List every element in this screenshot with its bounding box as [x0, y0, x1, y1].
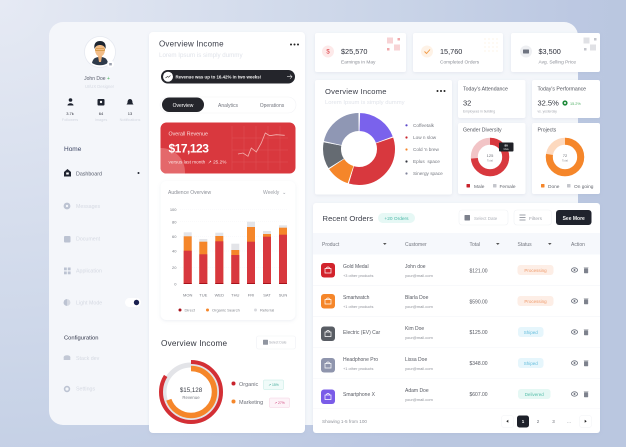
card: overall revenue: versus last month ↗ 25.2%: [168, 160, 226, 164]
nav: settings: Settings: [76, 386, 95, 392]
card: projects: [532, 123, 600, 194]
panel: overview income pie: Overview Income: [325, 87, 387, 96]
table header: [313, 233, 600, 254]
chart: stacked bars: SUN: [279, 292, 287, 298]
heading: overview income: Overview Income: [159, 40, 224, 48]
card: today's performance: Today's Performance: [538, 86, 586, 92]
card: gender diversity: Total: [487, 158, 493, 162]
button: filters: Filters: [529, 216, 543, 222]
chart: stacked bars: 20: [172, 265, 177, 270]
text: ring center value: $15,128: [180, 387, 203, 394]
table row: smartphone x: $607.00: [470, 392, 488, 398]
tabs: Analytics: [218, 103, 238, 109]
chart: stacked bars: SAT: [263, 292, 271, 298]
chart: stacked bars: 40: [172, 248, 177, 254]
stat: followers: 3.7k: [66, 111, 74, 116]
badge: order count: +20 Orders: [384, 216, 409, 222]
card: today's attendance: [458, 80, 526, 118]
chart legend: Organic Search: [212, 308, 240, 312]
pagination: 2: [537, 419, 540, 424]
button: select date: Select Date: [269, 340, 287, 344]
stat: followers: [62, 98, 78, 122]
card: overall revenue: Overall Revenue: [168, 132, 208, 138]
chart: stacked bars: THU: [231, 292, 240, 298]
stat: followers: Followers: [62, 118, 78, 122]
table row: gold medal: Processing: [524, 268, 547, 273]
card: gender diversity: Gender Diversity: [463, 128, 502, 134]
button: see more: [556, 210, 592, 225]
stat card: completed orders: [413, 33, 503, 72]
tabs: [160, 97, 296, 113]
icon: avatar: [84, 36, 116, 68]
legend: pie: Low n slow: [413, 135, 437, 140]
table row: smartwatch: Blarla Doe: [405, 295, 429, 301]
stat: images: [95, 99, 107, 122]
chart: stacked bars: 0: [174, 282, 177, 286]
nav: document: Document: [76, 236, 101, 242]
table header: Action: [571, 242, 585, 248]
panel: overview income pie: [315, 80, 452, 194]
table row: headphone pro: [321, 357, 588, 372]
table row: smartwatch: your@mail.com: [405, 304, 434, 309]
table row: electric car: your@mail.com: [405, 335, 434, 340]
nav: application: Application: [76, 268, 102, 274]
card: projects: Total: [562, 158, 568, 162]
table row: smartphone x: Delivered: [525, 392, 544, 397]
chart: stacked bars: WED: [215, 292, 224, 298]
stat: images: Images: [95, 118, 107, 122]
chart: gender donut: [474, 141, 506, 173]
card: gender diversity: Male: [474, 184, 485, 190]
stat card: completed orders: Completed Orders: [440, 60, 480, 66]
legend: pie: Coffeetalk: [413, 123, 435, 128]
text: subtitle: Lorem Ipsum is simply dummy: [159, 52, 243, 59]
table row: smartphone x: Adam Doe: [405, 388, 429, 394]
chart: stacked bars: FRI: [248, 292, 254, 298]
stat: notifications: [120, 99, 140, 122]
banner: revenue alert: [161, 70, 295, 84]
table row: gold medal: your@mail.com: [405, 273, 434, 278]
table row: gold medal: $121.00: [470, 268, 488, 274]
table row: headphone pro: +1 other products: [343, 366, 373, 371]
card: today's performance: 15.2%: [570, 102, 581, 106]
card: projects: Done: [548, 184, 560, 190]
nav: document: [64, 236, 101, 242]
table row: smartphone x: your@mail.com: [405, 397, 434, 402]
stat: notifications: 13: [128, 111, 133, 116]
card: today's performance: [532, 80, 600, 118]
text: user role: UI/UX Designer: [85, 84, 115, 89]
stat card: selling price: $3,500: [538, 47, 561, 56]
tooltip: 80: [505, 144, 508, 148]
stat: images: 64: [99, 111, 104, 116]
card: gender diversity: 125: [487, 153, 494, 158]
nav: messages: Messages: [76, 204, 100, 210]
card: audience overview: Audience Overview: [168, 190, 211, 196]
panel: main background: [49, 22, 578, 425]
card: today's attendance: 32: [463, 98, 471, 108]
stat card: selling price: [511, 33, 600, 72]
table header: Status: [518, 242, 532, 248]
heading: Home: Home: [64, 146, 82, 153]
table row: smartwatch: +1 other products: [343, 304, 373, 309]
table row: smartwatch: Processing: [524, 299, 547, 304]
table row: gold medal: Gold Medal: [343, 264, 369, 270]
stat card: earnings: $: [326, 50, 330, 56]
table row: electric car: Kim Doe: [405, 326, 424, 332]
chart: projects donut: [549, 141, 581, 173]
table row: electric car: [321, 326, 588, 341]
table row: headphone pro: Shiped: [524, 361, 538, 366]
card: audience overview: [160, 181, 296, 320]
chart: revenue sparkline: [238, 133, 285, 156]
stat card: earnings: Earnings in May: [341, 60, 376, 66]
card: gender diversity: Female: [500, 184, 516, 190]
nav: dashboard: [64, 169, 140, 178]
nav: light mode toggle: Light Mode: [76, 300, 102, 306]
chart: stacked bars: 80: [172, 220, 177, 224]
nav: light mode toggle: [64, 298, 141, 307]
chart legend: [178, 308, 274, 312]
legend: organic: Organic: [239, 382, 259, 388]
table row: electric car: $125.00: [470, 330, 488, 336]
nav: messages: [64, 203, 100, 210]
pagination: [502, 416, 592, 428]
text: ring center label: Revenue: [182, 395, 200, 400]
table row: electric car: Shiped: [524, 330, 538, 335]
legend: organic: ↗ 15%: [268, 383, 279, 387]
table row: gold medal: John doe: [405, 264, 426, 270]
stat card: selling price: Avg. Selling Price: [538, 60, 576, 66]
nav: application: [64, 268, 102, 274]
legend: pie: Eplus space: [413, 159, 440, 164]
nav: settings: [65, 386, 95, 392]
legend: pie: [405, 123, 443, 176]
nav: dashboard: Dashboard: [76, 172, 102, 178]
tabs: Overview: [173, 103, 194, 109]
legend: marketing: ↗ 27%: [274, 401, 285, 405]
chart: stacked bars: TUE: [199, 292, 208, 298]
stat card: earnings: $25,570: [341, 47, 367, 56]
panel: middle column: [137, 32, 305, 433]
chart: revenue ring: [161, 362, 221, 422]
button: select date: Select Date: [474, 216, 498, 221]
text: pagination summary: Showing 1-5 from 100: [322, 419, 367, 424]
pagination: ...: [567, 419, 571, 424]
stat card: earnings: [315, 33, 406, 72]
chart: stacked bars: MON: [183, 292, 192, 298]
table row: smartphone x: Smartphone X: [343, 392, 376, 398]
button: select date: [459, 210, 508, 225]
legend: organic: [232, 380, 284, 390]
table header: Product: [322, 242, 340, 248]
button: see more: See More: [563, 216, 585, 222]
nav: stack dev: [64, 355, 100, 362]
heading: recent orders: Recent Orders: [322, 214, 373, 223]
legend: pie: Cold 'n brew: [413, 147, 440, 152]
heading: overview income lower: Overview Income: [161, 339, 227, 348]
chart: stacked bars: 100: [170, 207, 177, 212]
stat: notifications: Notifications: [120, 118, 140, 122]
card: projects: 72: [563, 153, 568, 158]
card: overall revenue: [160, 122, 296, 174]
chart legend: Referral: [260, 308, 274, 312]
table row: electric car: Electric (EV) Car: [343, 330, 381, 336]
table header: Customer: [405, 242, 427, 248]
card: today's attendance: Today's Attendance: [463, 86, 508, 92]
badge: order count: [378, 213, 415, 223]
button: select date: [256, 336, 296, 349]
chart: donut: [332, 122, 386, 176]
card: gender diversity: [458, 123, 526, 194]
table row: gold medal: +3 other products: [343, 273, 373, 278]
panel: sidebar: [62, 36, 141, 392]
card: projects: On going: [574, 184, 594, 190]
tabs: Operations: [260, 103, 285, 109]
card: projects: Projects: [538, 128, 557, 134]
icon: more menu: [290, 44, 299, 46]
text: user name: John Doe +: [84, 76, 110, 82]
chart legend: Direct: [184, 308, 196, 312]
tooltip: [499, 142, 514, 152]
table row: headphone pro: Lissa Doe: [405, 357, 427, 363]
panel: recent orders: [313, 203, 600, 433]
card: overall revenue: $17,123: [168, 142, 209, 156]
table row: smartwatch: [321, 294, 588, 309]
table row: headphone pro: your@mail.com: [405, 366, 434, 371]
panel: overview income pie: Lorem Ipsum is simply dummy: [325, 100, 405, 106]
table row: headphone pro: $348.00: [470, 361, 488, 367]
nav: stack dev: Stack dev: [76, 356, 100, 362]
table header: Total: [470, 242, 480, 248]
table row: smartphone x: [321, 388, 588, 404]
card: today's performance: vs. yesterday: [538, 110, 557, 114]
card: today's attendance: Employees in building: [463, 110, 495, 114]
legend: marketing: Marketing: [239, 400, 263, 406]
chart: stacked bars: [170, 207, 288, 298]
table row: smartwatch: $590.00: [470, 300, 488, 306]
chart: stacked bars: 60: [172, 234, 177, 239]
button: filters: [514, 210, 552, 225]
table row: smartwatch: Smartwatch: [343, 295, 370, 301]
tooltip: Male: [504, 148, 509, 151]
card: today's performance: 32.5%: [538, 98, 559, 108]
pagination: 3: [552, 419, 555, 424]
pagination: 1: [522, 419, 525, 424]
stat card: completed orders: 15,760: [440, 47, 462, 56]
legend: marketing: [232, 398, 290, 408]
table row: gold medal: [321, 263, 588, 278]
banner: revenue alert: Revenue was up to 16.42% in two weeks!: [176, 74, 262, 80]
card: audience overview: Weekly ⌄: [263, 190, 286, 196]
legend: pie: Sinergy space: [413, 171, 443, 176]
table row: headphone pro: Headphone Pro: [343, 357, 378, 363]
heading: Configuration: Configuration: [64, 336, 98, 342]
